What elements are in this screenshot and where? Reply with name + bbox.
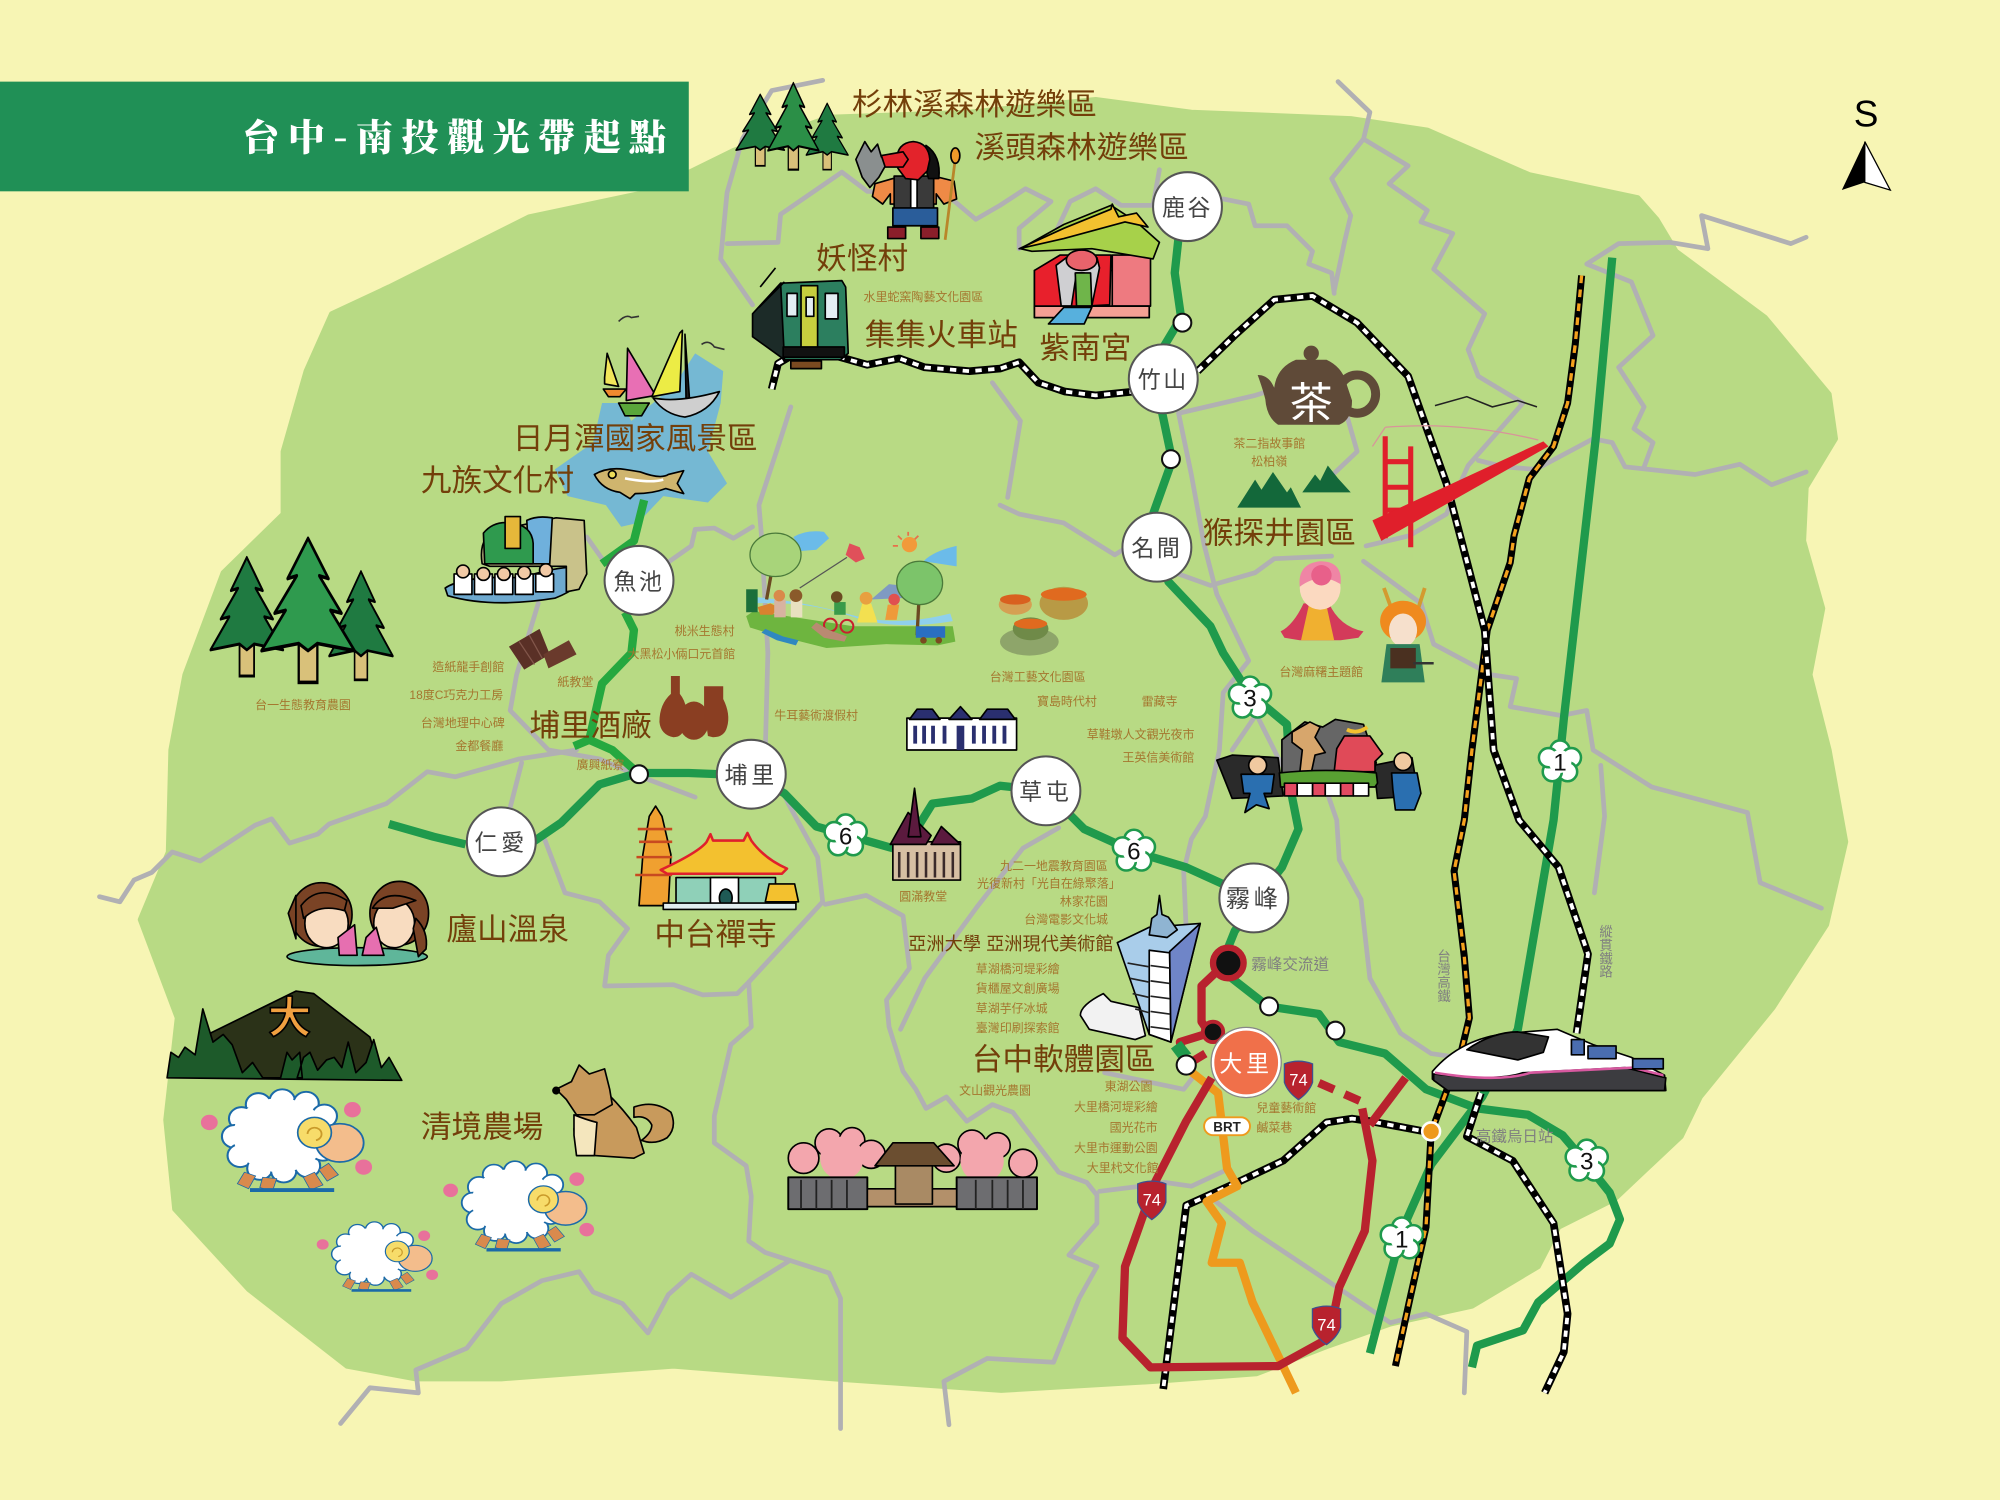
icon: chocolate [509, 629, 577, 670]
freeway 1 [1370, 258, 1612, 1353]
shield: 74 east: 74 [1289, 1070, 1308, 1089]
label: 埔里酒廠: 埔里酒廠 [529, 709, 652, 743]
high speed rail line [1395, 276, 1582, 1366]
caotun labels: 王英信美術館 [1122, 749, 1194, 764]
tea area labels: 松柏嶺 [1251, 454, 1287, 469]
compass: S [1854, 93, 1878, 134]
label: 日月潭: 日月潭國家風景區 [513, 422, 758, 456]
icon: tea cups [999, 587, 1088, 656]
icon: park scene [746, 531, 957, 648]
label: 亞洲大學: 亞洲大學 亞洲現代美術館 [908, 933, 1114, 954]
label: 縱貫鐵路: 縱貫鐵路 [1597, 925, 1613, 979]
badge: route 3 south: 3 [1580, 1149, 1593, 1176]
label: 廬山溫泉: 廬山溫泉 [446, 913, 569, 947]
label: 九族文化村: 九族文化村 [421, 464, 574, 498]
dali labels: 大里橋河堤彩繪 [1074, 1099, 1158, 1114]
wufeng labels: 光復新村「光自在綠聚落」 [977, 876, 1121, 891]
icon: software park tower [1080, 895, 1200, 1042]
icon: sheep large [201, 1089, 372, 1191]
icon: teapot: 茶 [1290, 380, 1333, 428]
label: 紫南宮: 紫南宮 [1040, 331, 1131, 365]
puli labels: 造紙龍手創館 [432, 659, 504, 674]
dali labels: 東湖公園 [1105, 1079, 1152, 1094]
town: 埔里: 埔里 [725, 756, 778, 790]
town: 魚池: 魚池 [614, 562, 665, 596]
town: 大里 [1211, 1027, 1281, 1098]
icon: sailboats [603, 316, 724, 417]
label: 台灣高鐵: 台灣高鐵 [1435, 949, 1451, 1004]
caotun labels: 寶島時代村 [1037, 693, 1097, 708]
railway lines [772, 296, 1588, 1393]
label: 中台禪寺: 中台禪寺 [654, 918, 777, 952]
wufeng labels: 九二一地震教育園區 [1000, 858, 1108, 873]
soft park marker [1171, 1041, 1191, 1059]
label: 高鐵烏日站: 高鐵烏日站 [1476, 1128, 1553, 1146]
shield: 74 west [1138, 1181, 1166, 1220]
town: 埔里 [717, 740, 786, 809]
badge: freeway 1 north [1539, 740, 1581, 781]
label: 杉林溪: 杉林溪森林遊樂區 [852, 88, 1097, 122]
icon: sheep small [317, 1222, 438, 1291]
shield: 74 south [1312, 1306, 1341, 1345]
label: 妖怪村: 妖怪村 [816, 242, 908, 276]
dali labels: 鹹菜巷 [1256, 1119, 1292, 1134]
icon: small trees [736, 83, 848, 170]
map land area [140, 99, 1846, 1390]
BRT line [1188, 1069, 1296, 1393]
town: 霧峰 [1219, 864, 1288, 932]
badge: route 6 east: 6 [1127, 839, 1141, 866]
icon: zhongtai temple [635, 806, 798, 909]
tea area labels [1233, 436, 1305, 469]
badge: freeway 1 south: 1 [1395, 1226, 1409, 1253]
icon: hot spring couple [287, 881, 429, 966]
puli labels: 紙教堂 [557, 674, 593, 689]
wufeng labels: 草湖芋仔冰城 [976, 1001, 1048, 1016]
town: 魚池 [605, 546, 673, 615]
town: 草屯: 草屯 [1019, 773, 1073, 807]
icon: samurai float [1217, 719, 1421, 812]
caotun labels: 台灣工藝文化園區 [990, 669, 1086, 684]
wufeng labels [899, 858, 1121, 1097]
label: 台灣麻糬主題館: 台灣麻糬主題館 [1279, 664, 1363, 679]
label: 水里蛇窯: 水里蛇窯陶藝文化園區 [864, 289, 983, 304]
town: 鹿谷 [1153, 172, 1222, 241]
wufeng labels: 台灣電影文化城 [1024, 911, 1108, 926]
puli labels: 廣興紙寮 [577, 757, 624, 772]
route 6 and route 3 highways [389, 237, 1620, 1367]
wufeng labels: 圓滿教堂 [899, 889, 947, 904]
puli labels: 台灣地理中心碑 [421, 715, 505, 730]
BRT badge [1204, 1117, 1250, 1135]
title banner: 台中-南投觀光帶起點 [242, 108, 675, 162]
dali labels: 兒童藝術館 [1256, 1100, 1316, 1115]
icon: fish [594, 469, 684, 499]
grey local roads [99, 80, 1821, 1429]
BRT badge: BRT [1213, 1119, 1242, 1134]
label: 猴探井園區: 猴探井園區 [1203, 516, 1356, 550]
compass [1842, 93, 1890, 190]
label: 台中軟體園區: 台中軟體園區 [972, 1043, 1156, 1077]
icon: sheep medium [443, 1161, 594, 1251]
town: 草屯 [1011, 756, 1080, 825]
label: 集集火車站: 集集火車站 [865, 319, 1018, 353]
icon: mansion [907, 707, 1017, 750]
dali labels: 大里杙文化館 [1087, 1160, 1159, 1175]
wufeng labels: 臺灣印刷探索館 [976, 1020, 1060, 1035]
wufeng labels: 草湖橋河堤彩繪 [976, 961, 1060, 976]
caotun labels [990, 669, 1194, 764]
tea area labels: 茶二指故事館 [1233, 436, 1305, 451]
shield: 74 south: 74 [1317, 1315, 1336, 1334]
puli labels: 金都餐廳 [455, 738, 503, 753]
icon: church [890, 788, 960, 880]
badge: freeway 1 south [1381, 1217, 1423, 1258]
shield: 74 west: 74 [1143, 1190, 1161, 1209]
title banner [0, 82, 689, 191]
route 74 [1122, 963, 1406, 1367]
sun moon lake [555, 353, 727, 527]
town: 大里: 大里 [1219, 1044, 1273, 1078]
icon: green mountains [1237, 466, 1351, 508]
icon: samurai doll [1380, 588, 1434, 682]
badge: route 3 north: 3 [1243, 686, 1257, 713]
icon: red bridge [1372, 397, 1548, 547]
icon: hsr train [1432, 1029, 1666, 1091]
badge: route 6 west: 6 [839, 823, 852, 850]
icon: dog [553, 1065, 673, 1158]
label: 溪頭: 溪頭森林遊樂區 [974, 131, 1189, 165]
puli labels: 18度C巧克力工房 [409, 687, 503, 702]
puli labels: 大黑松小倆口元首館 [628, 646, 735, 661]
icon: teapot [1258, 346, 1376, 428]
town: 霧峰: 霧峰 [1226, 879, 1282, 914]
wufeng labels: 貨櫃屋文創廣場 [976, 980, 1060, 995]
icon: kuzu culture float [445, 517, 587, 603]
badge: route 6 east [1113, 830, 1155, 871]
town: 名間: 名間 [1131, 529, 1182, 563]
badge: route 3 south [1566, 1140, 1608, 1180]
label: 清境農場: 清境農場 [421, 1111, 543, 1145]
badge: freeway 1 north: 1 [1553, 749, 1567, 776]
wufeng labels: 文山觀光農園 [959, 1082, 1031, 1097]
dali labels: 大里市運動公園 [1074, 1140, 1158, 1155]
town: 鹿谷: 鹿谷 [1162, 189, 1213, 223]
badge: route 6 west [825, 814, 867, 855]
puli labels: 台一生態教育農園 [255, 697, 351, 712]
caotun labels: 雷藏寺 [1142, 694, 1178, 708]
icon: mountain: 大 [268, 995, 311, 1043]
icon: green train [753, 268, 848, 369]
badge: route 3 north [1229, 677, 1271, 717]
town: 仁愛 [467, 807, 536, 876]
caotun labels: 草鞋墩人文觀光夜市 [1087, 727, 1194, 742]
town: 竹山: 竹山 [1138, 361, 1189, 395]
town: 竹山 [1129, 344, 1198, 413]
puli labels: 桃米生態村 [675, 623, 735, 638]
icon: zinan temple [1019, 204, 1159, 324]
wufeng labels: 林家花園 [1060, 894, 1108, 909]
town: 仁愛: 仁愛 [475, 824, 528, 858]
icon: tengu [856, 142, 960, 240]
dali labels [1074, 1079, 1316, 1175]
icon: big trees [210, 538, 393, 682]
icon: mochi doll [1281, 561, 1364, 640]
dali labels: 國光花市 [1110, 1119, 1158, 1134]
puli labels: 牛耳藝術渡假村 [774, 707, 858, 722]
town: 名間 [1122, 513, 1191, 582]
junctions and stations [630, 314, 1440, 1140]
icon: mountain [167, 991, 402, 1080]
shield: 74 east [1284, 1061, 1313, 1100]
label: 霧峰交流道: 霧峰交流道 [1251, 955, 1329, 973]
icon: wine vases [659, 676, 728, 740]
icon: cherry blossom gate [788, 1128, 1037, 1209]
puli labels [255, 623, 858, 772]
